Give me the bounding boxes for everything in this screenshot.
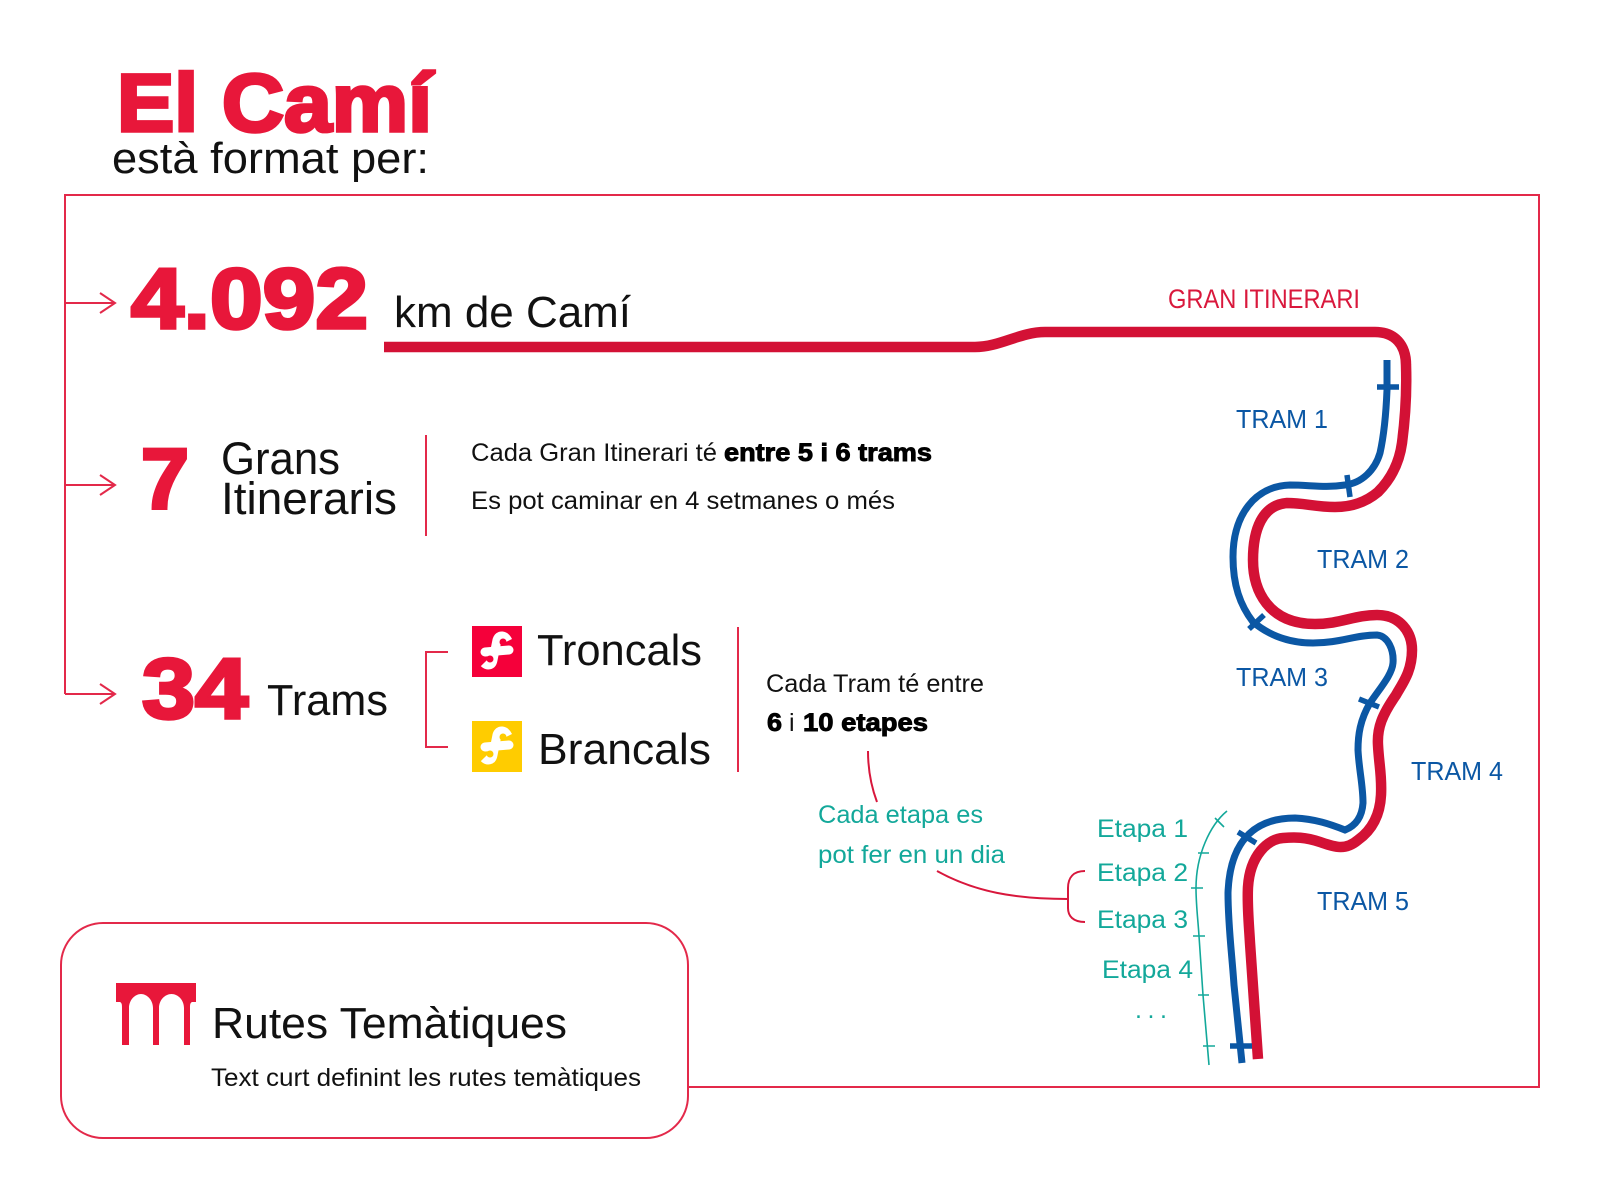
title: El Camí bbox=[117, 58, 434, 149]
label: Gran Itinerari: GRAN ITINERARI bbox=[1168, 284, 1360, 314]
text: Tram description: Cada Tram té entre bbox=[766, 670, 984, 698]
label: Tram 3: TRAM 3 bbox=[1236, 662, 1328, 692]
icon: aqueduct bbox=[116, 983, 196, 1045]
text: Gran Itinerari description bbox=[471, 439, 932, 515]
route ticks: tram boundaries bbox=[1230, 387, 1399, 1046]
stat: Trams: Trams bbox=[267, 676, 388, 725]
labels: etapes: Etapa 3 bbox=[1097, 906, 1188, 934]
stat: Grans Itineraris: Grans bbox=[221, 433, 340, 484]
panel: Rutes Temàtiques bbox=[61, 923, 688, 1138]
text: etapa note: Cada etapa es bbox=[818, 801, 983, 829]
text: etapa note: pot fer en un dia bbox=[818, 841, 1005, 869]
stat: km de Camí: km de Camí bbox=[394, 288, 632, 337]
text: Gran Itinerari description: Es pot caminar en 4 setmanes o més bbox=[471, 487, 895, 515]
title bbox=[112, 58, 434, 183]
text: Tram description: 6 bbox=[767, 709, 782, 737]
route: Trams bbox=[1228, 360, 1393, 1063]
text: Tram description bbox=[766, 670, 984, 737]
divider bbox=[425, 435, 427, 536]
stat: km de Camí: 4.092 bbox=[131, 252, 368, 347]
frame bbox=[65, 195, 1539, 1087]
labels: etapes bbox=[1097, 815, 1193, 1024]
stat: Grans Itineraris: 7 bbox=[141, 432, 189, 527]
bracket: tram types bbox=[426, 652, 448, 747]
labels: etapes: Etapa 1 bbox=[1097, 815, 1188, 843]
divider bbox=[737, 627, 739, 772]
text: Gran Itinerari description: Cada Gran Itinerari té bbox=[471, 439, 717, 467]
text: etapa note bbox=[818, 801, 1005, 869]
stat: Grans Itineraris: Itineraris bbox=[221, 473, 397, 524]
title: està format per: bbox=[112, 134, 429, 183]
label: Brancals: Brancals bbox=[538, 725, 711, 774]
stat: km de Camí bbox=[131, 252, 632, 347]
text: Rutes Temàtiques description: Text curt definint les rutes temàtiques bbox=[211, 1064, 641, 1092]
labels: etapes: Etapa 2 bbox=[1097, 859, 1188, 887]
connector: tram text to etapa note bbox=[868, 751, 877, 802]
stat: Trams: 34 bbox=[142, 642, 248, 737]
text: Gran Itinerari description: entre 5 i 6 trams bbox=[724, 439, 932, 467]
icon: Brancals bbox=[472, 721, 522, 772]
arrow: row 3 bbox=[65, 684, 115, 704]
arrow: row 2 bbox=[65, 475, 115, 495]
stat: Grans Itineraris bbox=[141, 432, 397, 527]
label: Tram 5: TRAM 5 bbox=[1317, 886, 1409, 916]
text: Tram description: 10 etapes bbox=[803, 709, 928, 737]
label: Tram 4: TRAM 4 bbox=[1411, 756, 1503, 786]
connector: etapa note to bracket bbox=[937, 871, 1068, 899]
arrow: row 1 bbox=[65, 293, 115, 313]
label: Tram 1: TRAM 1 bbox=[1236, 404, 1328, 434]
route: etapes bbox=[1191, 811, 1227, 1065]
labels: etapes: Etapa 4 bbox=[1102, 956, 1193, 984]
heading: Rutes Temàtiques: Rutes Temàtiques bbox=[212, 999, 567, 1048]
text: Tram description: i bbox=[789, 709, 795, 737]
label: Tram 2: TRAM 2 bbox=[1317, 544, 1409, 574]
icon: Troncals bbox=[472, 626, 522, 677]
bracket: etapes bbox=[1068, 871, 1085, 922]
label: Troncals: Troncals bbox=[537, 626, 702, 675]
route: Gran Itinerari bbox=[384, 332, 1412, 1059]
stat: Trams bbox=[142, 642, 388, 737]
labels: etapes: ... bbox=[1135, 996, 1167, 1024]
